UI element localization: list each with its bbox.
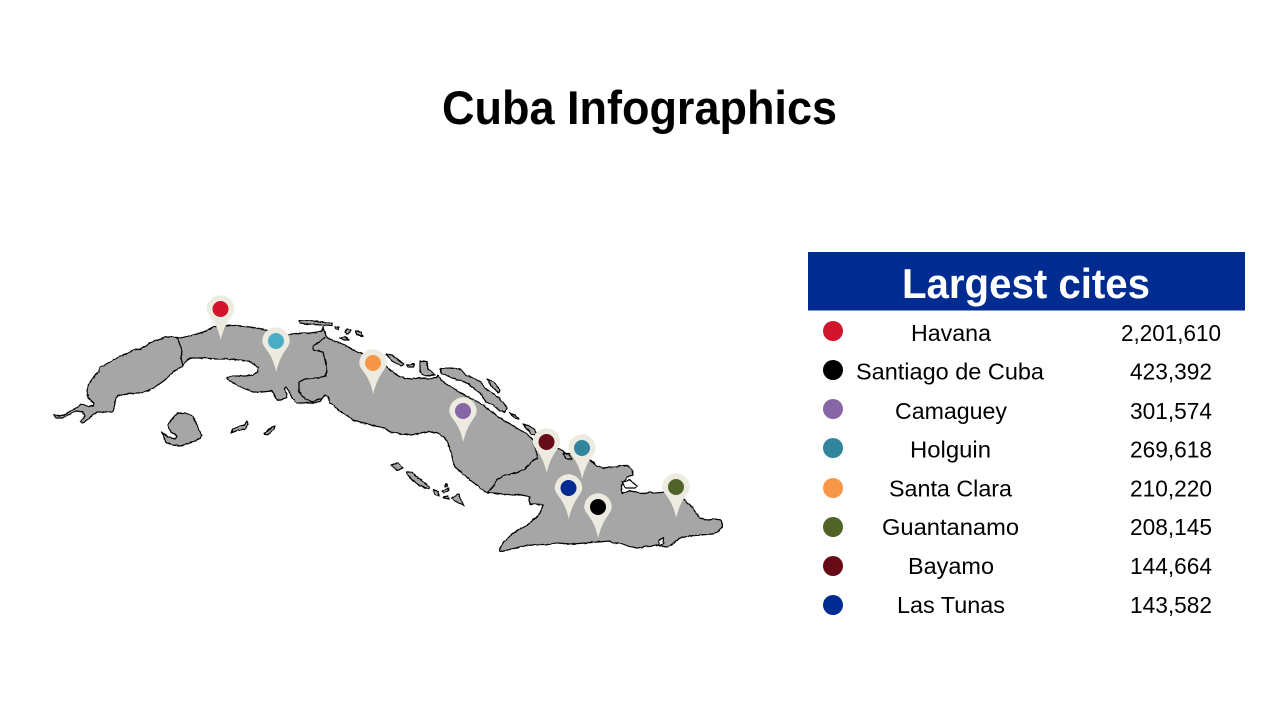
row: Santiago de Cuba: Santiago de Cuba: [856, 358, 1044, 384]
pin: Holguin: [568, 434, 596, 479]
row: Holguin: [823, 436, 1212, 462]
pin: Las Tunas: [555, 474, 582, 519]
row: Havana: [823, 320, 1221, 346]
map of Cuba: [53, 320, 723, 552]
row: Havana: Havana: [911, 320, 991, 346]
table: largest cities: [808, 252, 1245, 618]
title: Cuba Infographics: [442, 81, 837, 134]
row: Bayamo: [823, 553, 1212, 579]
row: Las Tunas: 143,582: [1130, 592, 1212, 618]
pin: Camaguey: [449, 397, 477, 442]
row: Las Tunas: Las Tunas: [897, 592, 1005, 618]
row: Guantanamo: Guantanamo: [882, 514, 1019, 540]
mainland: [53, 325, 723, 552]
Isla de la Juventud: [162, 413, 202, 446]
row: Camaguey: Camaguey: [895, 398, 1007, 424]
row: Santiago de Cuba: [823, 358, 1212, 384]
row: Bayamo: 144,664: [1130, 553, 1212, 579]
row: Holguin: 269,618: [1130, 436, 1212, 462]
pin: Santiago de Cuba: [584, 493, 612, 538]
pin: Santa Clara: [359, 349, 387, 394]
row: Guantanamo: 208,145: [1130, 514, 1212, 540]
row: Camaguey: 301,574: [1130, 398, 1212, 424]
row: Santa Clara: 210,220: [1130, 476, 1212, 502]
pin: Havana: [207, 295, 234, 340]
row: Camaguey: [823, 398, 1212, 424]
row: Santa Clara: [823, 476, 1212, 502]
row: Guantanamo: [823, 514, 1212, 540]
row: Santiago de Cuba: 423,392: [1130, 358, 1212, 384]
pin: Guantanamo: [662, 473, 690, 518]
table header: [808, 252, 1245, 310]
pin: Matanzas area: [262, 327, 290, 372]
row: Bayamo: Bayamo: [908, 553, 994, 579]
row: Holguin: Holguin: [910, 436, 991, 462]
table header: Largest cites: [902, 260, 1150, 307]
pin: Bayamo: [533, 428, 560, 473]
row: Havana: 2,201,610: [1121, 320, 1221, 346]
row: Santa Clara: Santa Clara: [889, 476, 1012, 502]
cays: [231, 421, 248, 433]
row: Las Tunas: [823, 592, 1212, 618]
province borders: [177, 337, 183, 366]
